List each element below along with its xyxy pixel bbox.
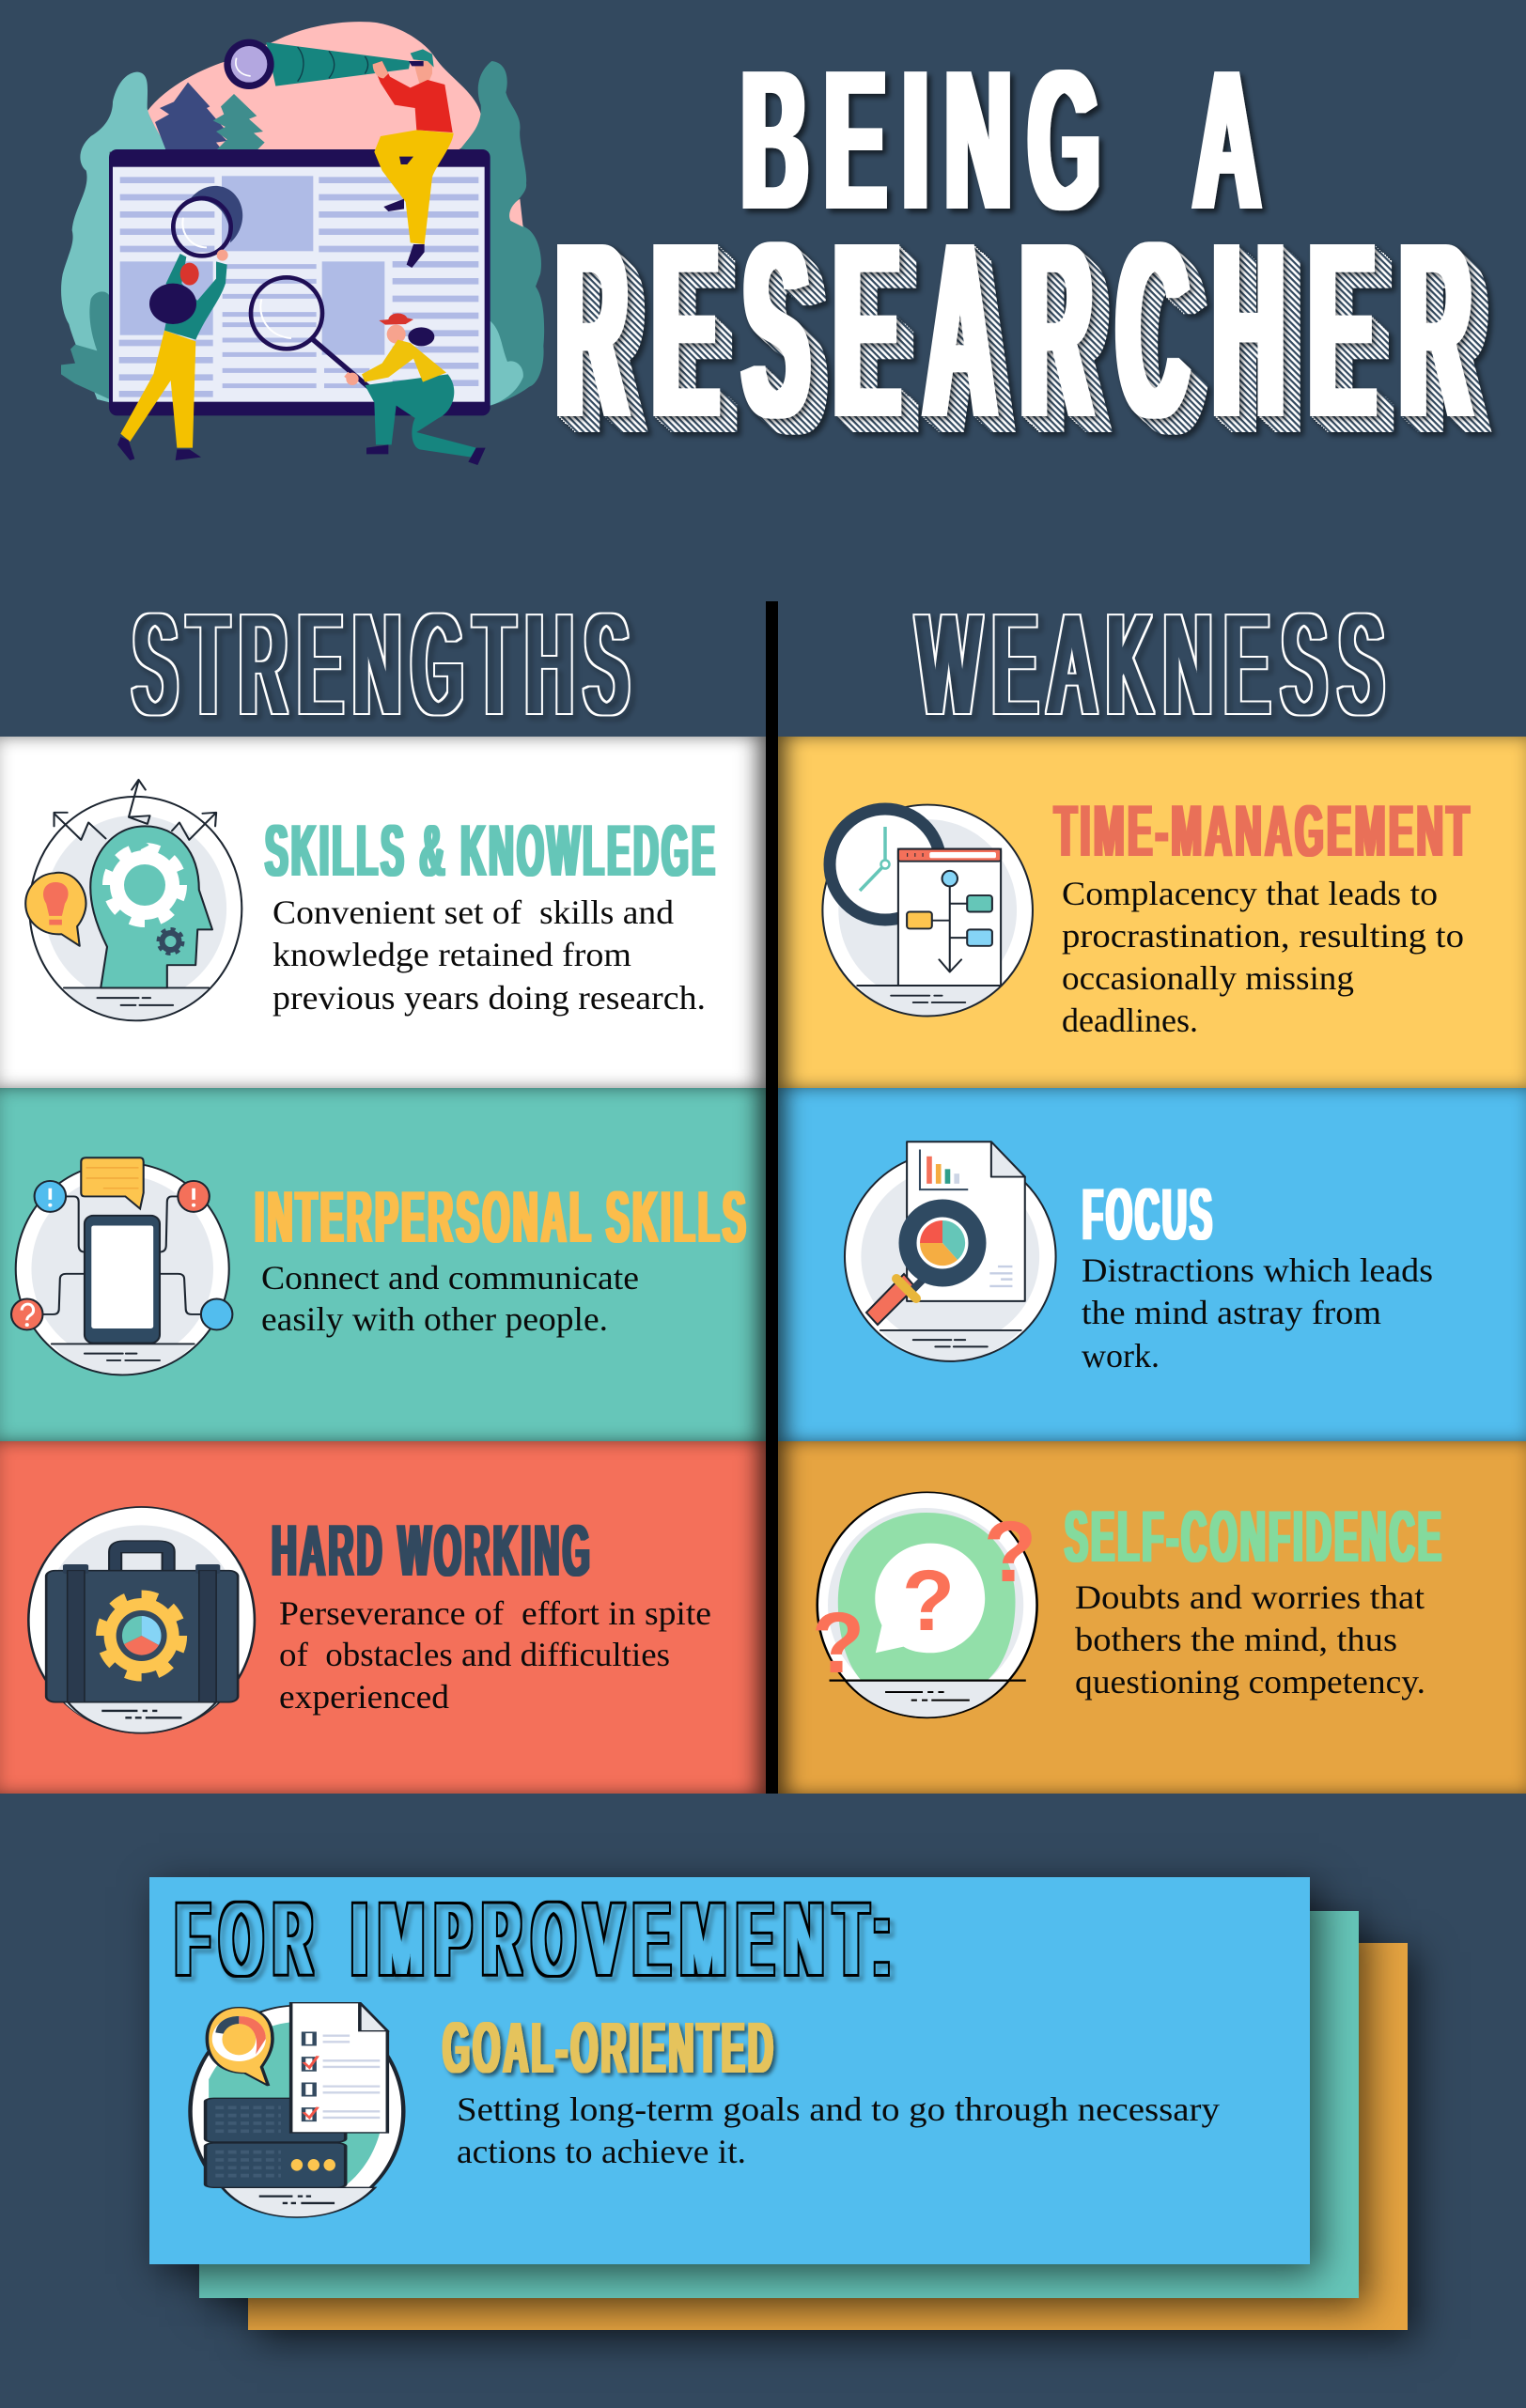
front card: for improvement: GOAL-ORIENTED xyxy=(443,2008,776,2089)
panel: skills and knowledge xyxy=(0,737,766,1088)
description: goal oriented: Setting long-term goals and to go through necessary xyxy=(457,2090,1220,2128)
description: self confidence xyxy=(1075,1578,1425,1701)
left lower foliage xyxy=(61,291,110,399)
description: focus xyxy=(1082,1251,1433,1375)
man on monitor xyxy=(373,49,454,268)
description: focus: work. xyxy=(1082,1337,1160,1375)
tree dark xyxy=(155,83,227,150)
pink blob xyxy=(148,22,481,150)
icon: checklist and servers xyxy=(191,2003,403,2217)
description: self confidence: bothers the mind, thus xyxy=(1075,1621,1397,1658)
description: skills and knowledge: previous years doing research. xyxy=(272,979,706,1017)
description: time management: occasionally missing xyxy=(1062,959,1354,997)
icon: clock and flowchart xyxy=(822,805,1033,1016)
icon: speech bubble with question marks: ? xyxy=(984,1504,1036,1600)
icon: head with gear xyxy=(25,780,241,1020)
tree green xyxy=(213,94,265,150)
telescope xyxy=(224,39,411,89)
center divider xyxy=(766,601,778,1794)
description: goal oriented xyxy=(457,2090,1220,2170)
right lower foliage xyxy=(490,321,523,406)
woman right xyxy=(346,314,486,465)
panel: focus: FOCUS xyxy=(1082,1173,1215,1255)
panel: time management xyxy=(778,737,1526,1088)
description: goal oriented: actions to achieve it. xyxy=(457,2133,746,2170)
right pink patch xyxy=(509,199,523,227)
panel: focus xyxy=(778,1088,1526,1441)
screen text rows and blocks xyxy=(119,176,478,394)
description: skills and knowledge: Convenient set of skills and xyxy=(272,893,674,931)
description: focus: the mind astray from xyxy=(1082,1294,1381,1331)
right foliage xyxy=(460,61,544,406)
icon: phone with speech bubble xyxy=(11,1157,232,1375)
panel: self confidence xyxy=(778,1441,1526,1794)
magnifier two xyxy=(251,277,388,404)
description: hard working: experienced xyxy=(279,1678,449,1716)
description: focus: Distractions which leads xyxy=(1082,1251,1433,1289)
monitor screen xyxy=(113,167,485,402)
woman left xyxy=(117,250,228,460)
description: self confidence: Doubts and worries that xyxy=(1075,1578,1425,1616)
description: skills and knowledge xyxy=(272,893,706,1017)
description: time management: Complacency that leads to xyxy=(1062,875,1438,912)
description: self confidence: questioning competency. xyxy=(1075,1663,1425,1701)
header: illustration and title xyxy=(61,22,1497,742)
icon: speech bubble with question marks: ? xyxy=(902,1553,955,1649)
description: interpersonal skills: easily with other people. xyxy=(261,1300,608,1338)
description: hard working: Perseverance of effort in spite xyxy=(279,1594,711,1632)
panel: interpersonal skills xyxy=(0,1088,766,1441)
back card: orange xyxy=(248,1943,1408,2330)
icon: speech bubble with question marks xyxy=(812,1492,1037,1717)
magnifier one xyxy=(173,186,242,256)
description: hard working: of obstacles and difficulties xyxy=(279,1636,670,1673)
description: skills and knowledge: knowledge retained from xyxy=(272,936,631,973)
monitor xyxy=(109,149,490,415)
icon: briefcase with gear xyxy=(28,1507,255,1733)
description: interpersonal skills: Connect and communicate xyxy=(261,1259,639,1297)
description: time management: procrastination, resulting to xyxy=(1062,917,1464,955)
icon: speech bubble with question marks: ? xyxy=(812,1595,864,1691)
description: interpersonal skills xyxy=(261,1259,639,1338)
description: time management: deadlines. xyxy=(1062,1002,1198,1039)
illustration: researchers with magnifiers and telescope xyxy=(61,22,544,465)
description: time management xyxy=(1062,875,1464,1039)
middle card: teal xyxy=(199,1911,1359,2298)
front card: for improvement xyxy=(149,1877,1310,2264)
description: hard working xyxy=(279,1594,711,1716)
header: illustration and title: STRENGTHS xyxy=(133,584,640,742)
icon: document under magnifier xyxy=(845,1142,1056,1361)
panel: hard working xyxy=(0,1441,766,1794)
title shadow: hatched extrusion of RESEARCHER xyxy=(559,246,1497,442)
left foliage xyxy=(61,72,166,402)
